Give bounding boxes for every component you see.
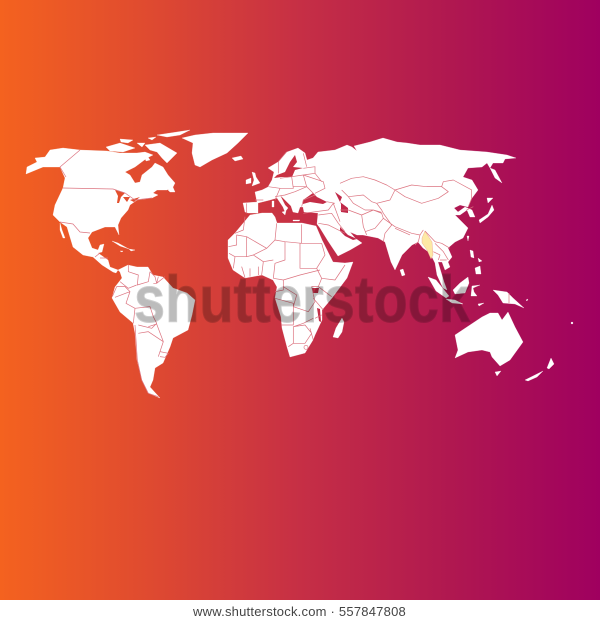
Newfoundland and Caribbean: [112, 185, 175, 252]
Sri Lanka: [400, 269, 405, 276]
Arctic islands: [106, 130, 190, 163]
Lake Malawi: [317, 308, 321, 322]
Australia: [455, 312, 523, 366]
Tasmania: [495, 371, 501, 376]
Sumatra: [428, 277, 449, 298]
landmasses: [26, 130, 573, 398]
Madagascar: [333, 318, 344, 338]
Java: [446, 299, 463, 304]
Eurasia: [243, 138, 516, 290]
Borneo: [453, 277, 469, 294]
South America: [112, 265, 195, 398]
Persian Gulf: [340, 227, 357, 240]
Iceland: [232, 156, 243, 161]
New Guinea border: [508, 293, 510, 303]
world map: [26, 130, 573, 398]
New Zealand: [525, 358, 554, 381]
Lake Victoria: [312, 288, 319, 293]
European and Middle Eastern borders: [247, 152, 345, 233]
North American borders: [60, 150, 152, 258]
Baja California: [60, 223, 65, 238]
Pacific dot: [571, 322, 573, 324]
Mediterranean islands: [272, 201, 300, 221]
Myanmar highlight: [422, 231, 433, 259]
North America: [26, 148, 175, 273]
country borders: [60, 150, 509, 397]
Africa: [228, 213, 353, 357]
Taiwan and Philippines: [467, 236, 482, 274]
Black Sea: [303, 193, 327, 204]
South American borders: [112, 265, 168, 397]
New Guinea: [493, 290, 528, 308]
African borders: [228, 217, 345, 349]
Baltic Sea: [274, 155, 303, 178]
Caspian Sea: [335, 192, 348, 213]
Great Lakes: [115, 190, 140, 203]
Sulawesi and Moluccas: [471, 285, 484, 306]
inland seas and lakes: [115, 155, 357, 322]
Greenland: [182, 133, 248, 167]
Sakhalin: [490, 168, 502, 183]
Japan: [479, 198, 494, 223]
caption: www.shutterstock.com · 557847808: [193, 604, 406, 619]
Asian borders: [340, 177, 473, 260]
UK and Ireland: [246, 172, 260, 186]
watermark: shutterstock: [134, 262, 470, 336]
